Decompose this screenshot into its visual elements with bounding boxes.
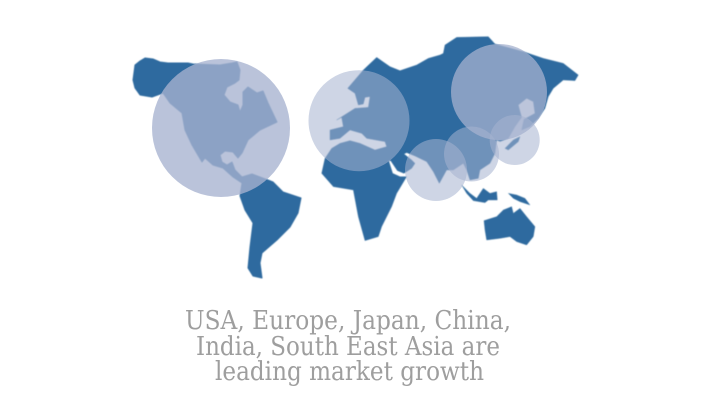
islands: Indonesia	[462, 185, 497, 203]
circle: South East Asia	[444, 126, 499, 182]
caption line 2: India, South East Asia are	[196, 332, 500, 362]
caption line 3: leading market growth	[215, 357, 484, 387]
continent: Americas	[133, 58, 301, 278]
circle: USA	[152, 59, 290, 197]
market circles	[152, 44, 547, 201]
circle: Europe	[308, 70, 410, 171]
continent: Australia	[484, 207, 535, 245]
circle: Japan	[490, 115, 540, 165]
circle: China	[451, 44, 547, 140]
continent: Eurasia and Africa	[322, 37, 578, 241]
circle: India	[405, 139, 467, 201]
world map	[133, 37, 578, 278]
island: New Guinea	[508, 193, 530, 205]
caption	[185, 306, 511, 387]
caption line 1: USA, Europe, Japan, China,	[185, 306, 511, 336]
island: Japan	[505, 137, 520, 150]
